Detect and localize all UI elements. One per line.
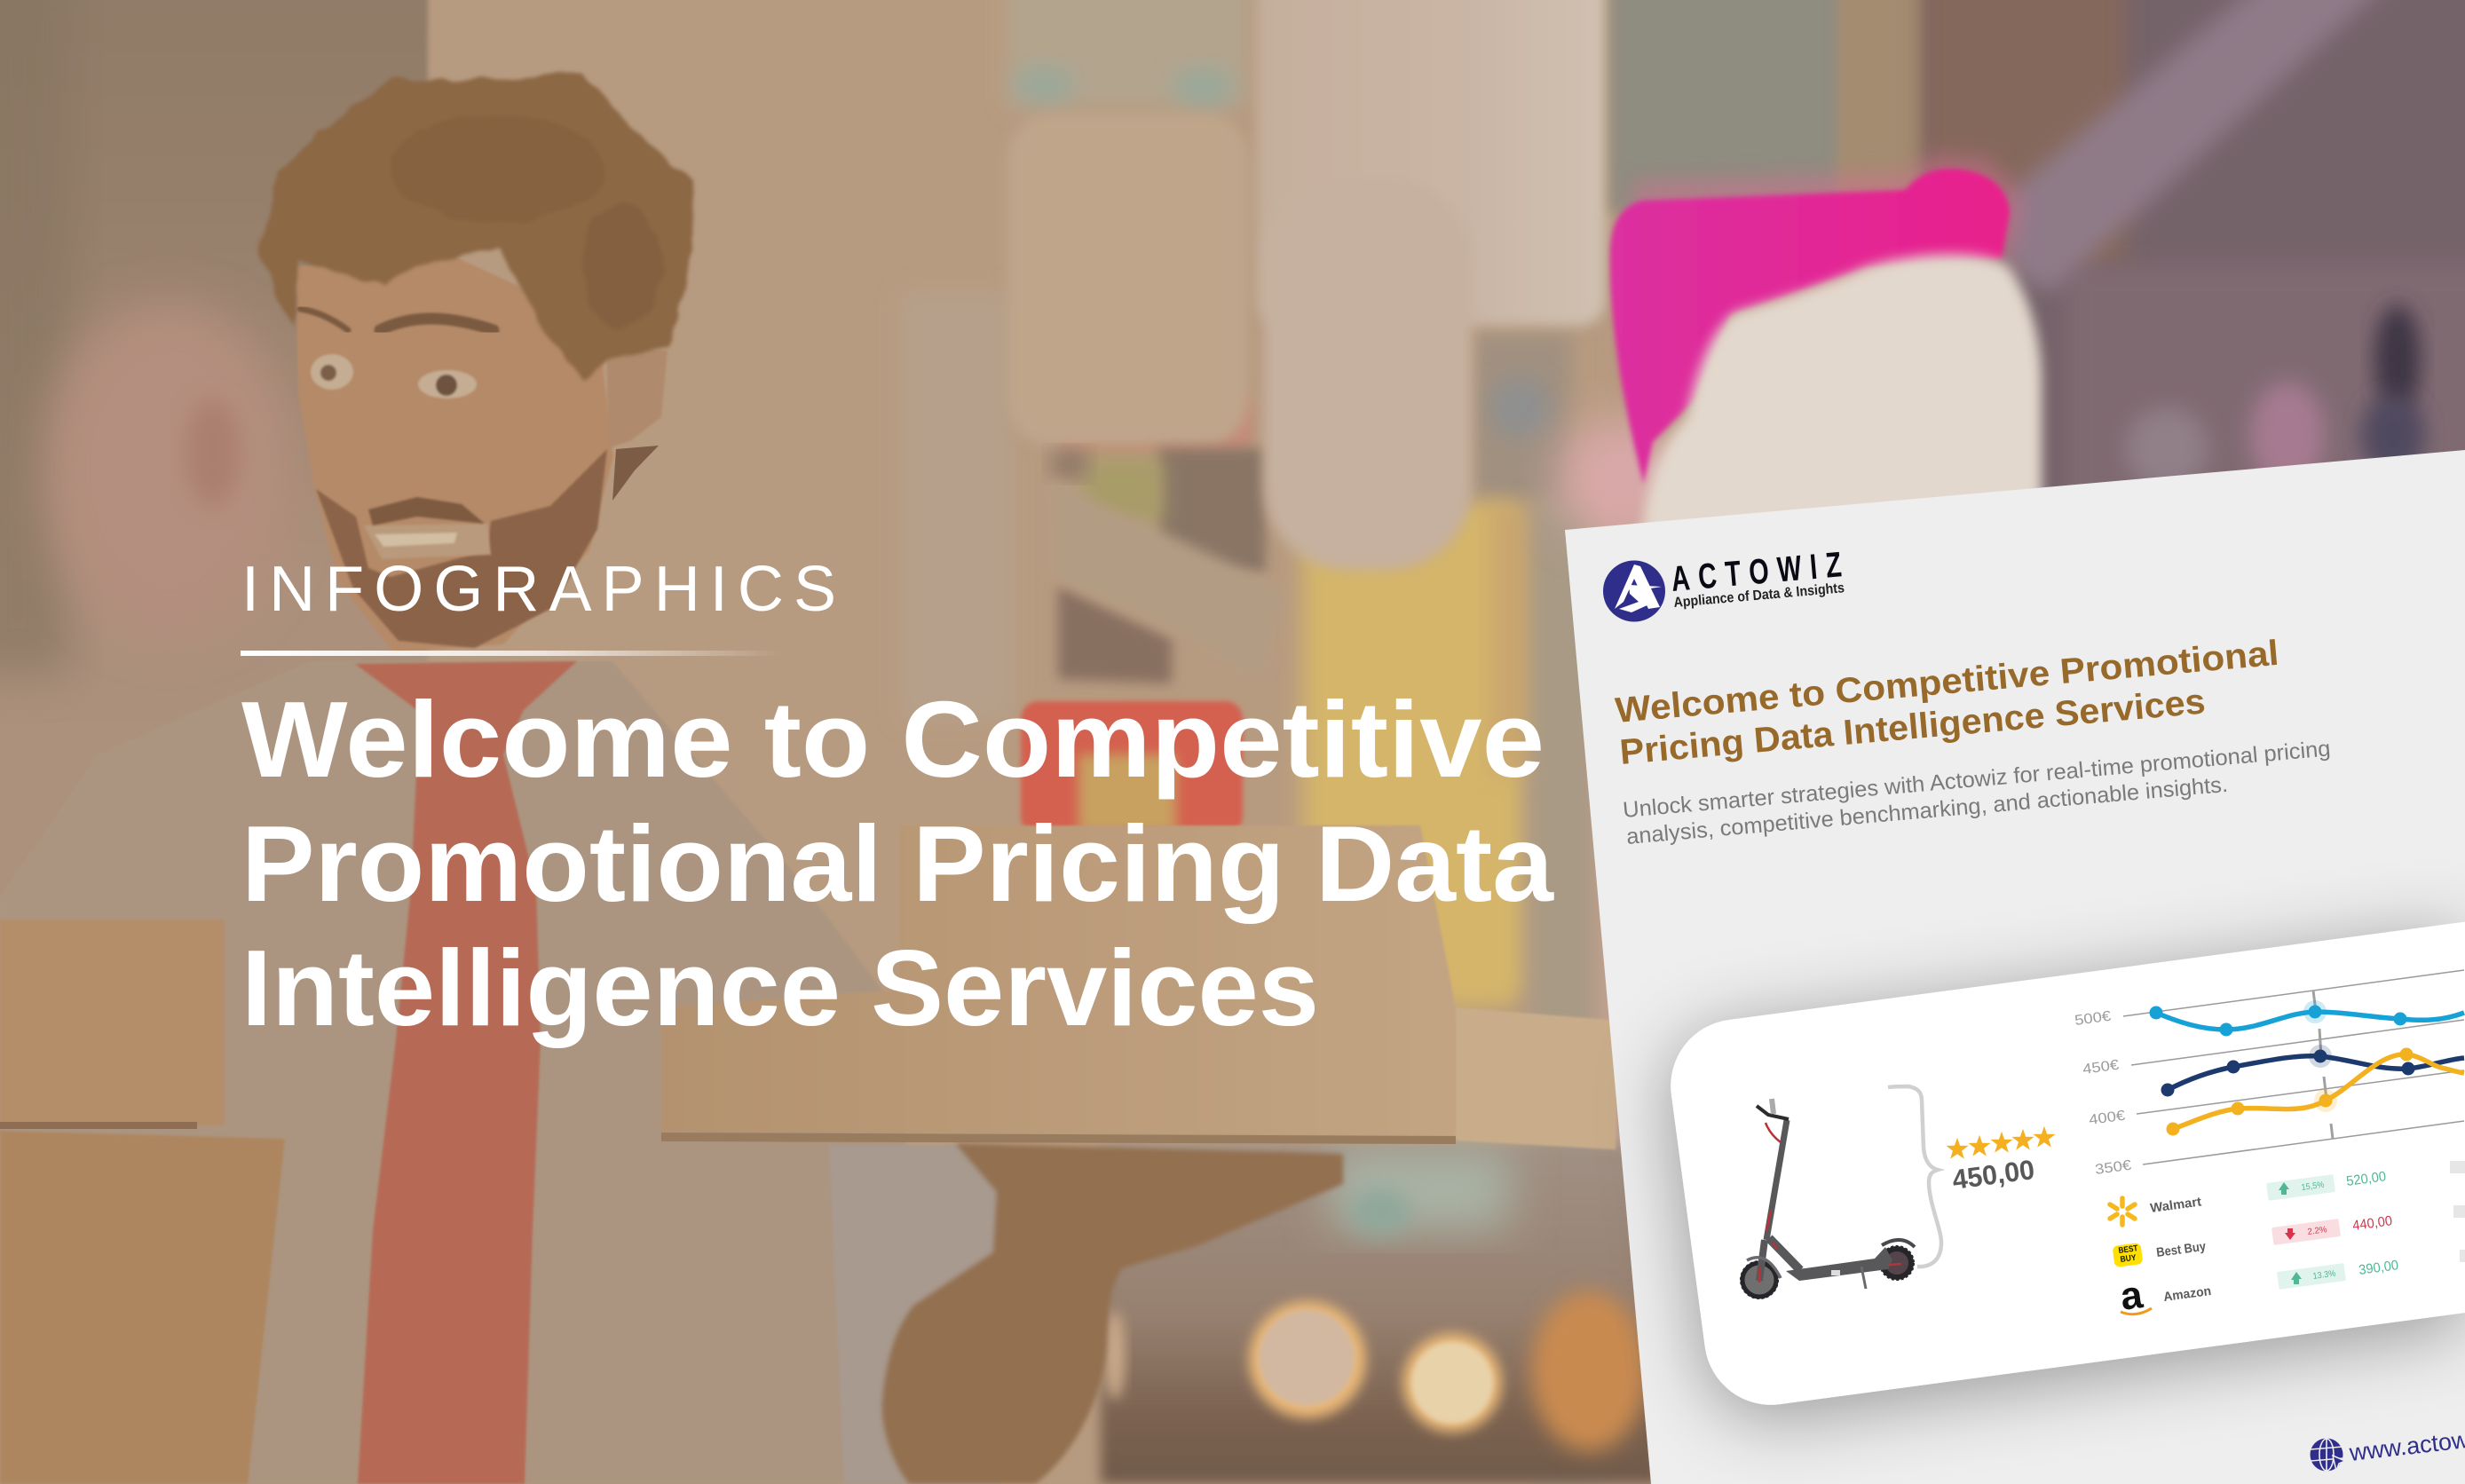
divider rule xyxy=(241,651,782,656)
retailer label: Best Buy xyxy=(2155,1240,2207,1260)
retailer label: Walmart xyxy=(2149,1195,2202,1216)
change badge xyxy=(2266,1174,2335,1201)
row: Best Buy xyxy=(2113,1213,2393,1267)
main title: Promotional Pricing Data xyxy=(241,803,1554,924)
panel heading: Pricing Data Intelligence Services xyxy=(1618,682,2207,772)
face xyxy=(296,257,613,652)
rating stars xyxy=(1946,1126,2056,1159)
main title: Welcome to Competitive xyxy=(241,679,1545,800)
moustache xyxy=(368,497,485,525)
box seam xyxy=(0,1122,197,1129)
clipped right-hand badges xyxy=(2450,1161,2465,1262)
cardboard box: left lower xyxy=(0,1131,285,1484)
beard xyxy=(316,449,607,648)
logo: Actowiz xyxy=(1603,545,1845,621)
product price: 450,00 xyxy=(1950,1154,2036,1196)
sideburn xyxy=(612,446,659,501)
price: 520,00 xyxy=(2345,1169,2387,1189)
teeth xyxy=(375,533,457,547)
series: navy xyxy=(2161,1045,2464,1097)
icon: up arrow xyxy=(2291,1272,2302,1284)
icon: Best Buy tag: BUY xyxy=(2120,1253,2137,1265)
card: product price comparison xyxy=(1671,922,2465,1405)
mouth xyxy=(364,524,491,559)
logo tagline: Appliance of Data & Insights xyxy=(1673,580,1845,611)
row: Walmart xyxy=(2110,1169,2387,1225)
cardboard box: side xyxy=(1456,1007,1620,1149)
price: 440,00 xyxy=(2351,1213,2393,1234)
main title xyxy=(241,679,1554,1048)
series: blue xyxy=(2150,1000,2464,1037)
hair xyxy=(261,73,692,382)
axis labels: 350€ xyxy=(2094,1158,2132,1178)
photo: delivery man holding boxes xyxy=(0,73,1620,1484)
icon: down arrow xyxy=(2285,1228,2295,1240)
change badge xyxy=(2277,1263,2346,1290)
line chart xyxy=(2074,970,2464,1178)
sleeve xyxy=(829,1145,1003,1484)
icon: Best Buy tag xyxy=(2113,1243,2143,1267)
main title: Intelligence Services xyxy=(241,928,1319,1048)
cardboard box: left upper xyxy=(0,920,225,1125)
eyebrow label: INFOGRAPHICS: INFOGRAPHICS xyxy=(241,554,836,625)
logo wordmark: ACTOWIZ xyxy=(1670,545,1843,599)
change value: 2.2% xyxy=(2307,1225,2327,1237)
icon: Walmart spark xyxy=(2110,1198,2135,1225)
website footer xyxy=(2310,1418,2465,1472)
icon: Amazon: a xyxy=(2118,1273,2145,1319)
curly brace xyxy=(1888,1086,1941,1267)
icon: globe with cursor xyxy=(2310,1438,2345,1472)
panel: tilted report page xyxy=(1565,450,2465,1484)
change badge xyxy=(2271,1219,2341,1245)
eyebrows xyxy=(300,309,494,330)
price: 390,00 xyxy=(2358,1258,2399,1278)
box underside xyxy=(661,1133,1456,1144)
panel description: Unlock smarter strategies with Actowiz for real-time promotional pricing xyxy=(1622,736,2331,823)
icon: up arrow xyxy=(2279,1182,2289,1195)
tie xyxy=(355,661,577,1484)
card background xyxy=(1671,922,2465,1405)
change value: 13.3% xyxy=(2312,1269,2336,1282)
axis labels: 400€ xyxy=(2088,1109,2126,1128)
icon: electric scooter xyxy=(1741,1099,1915,1298)
panel heading: Welcome to Competitive Promotional xyxy=(1614,634,2280,730)
change value: 15,5% xyxy=(2301,1180,2325,1193)
retailer label: Amazon xyxy=(2162,1284,2212,1305)
axis labels xyxy=(2074,1009,2132,1178)
axis labels: 450€ xyxy=(2082,1058,2120,1077)
cardboard box: held box xyxy=(661,825,1456,1136)
shirt xyxy=(504,662,905,1484)
axis labels: 500€ xyxy=(2074,1009,2112,1029)
icon: Best Buy tag: BEST xyxy=(2118,1243,2138,1256)
panel heading xyxy=(1614,634,2280,772)
hand and forearm xyxy=(882,1143,1343,1484)
panel description: analysis, competitive benchmarking, and actionable insights. xyxy=(1625,772,2229,849)
eyes xyxy=(311,354,477,399)
page sheet xyxy=(1565,450,2465,1484)
ear xyxy=(607,346,668,448)
logo mark xyxy=(1603,561,1665,621)
series: yellow xyxy=(2166,1047,2464,1136)
row: Amazon xyxy=(2118,1258,2399,1319)
